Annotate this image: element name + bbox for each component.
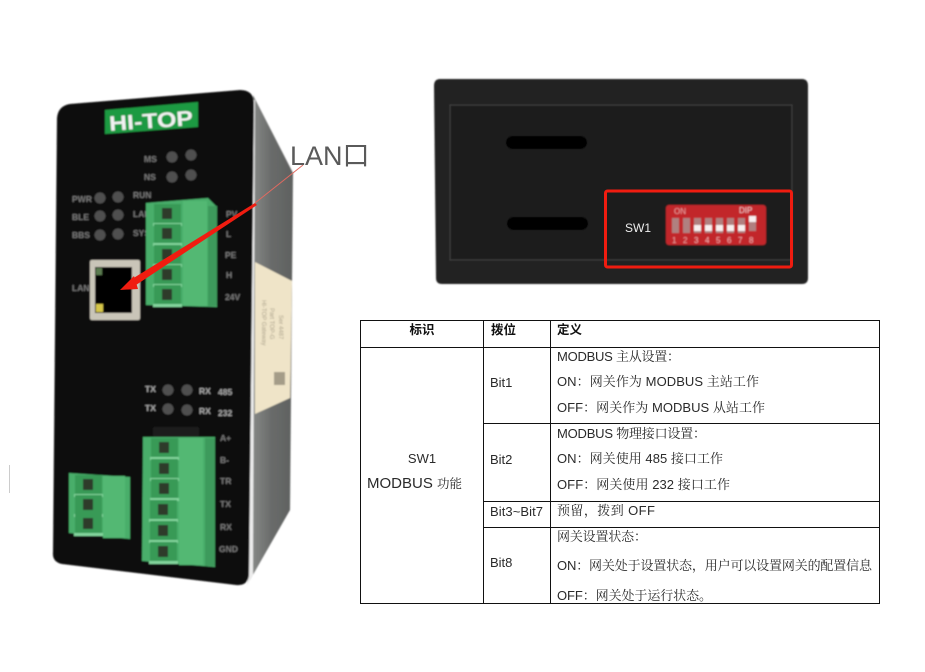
DIP switch: 4 bbox=[705, 236, 710, 245]
definition: Bit2 bbox=[557, 426, 730, 492]
row label: SW1 MODBUS: SW1 bbox=[408, 451, 436, 466]
definition: Bit2: OFF：网关使用 232 接口工作 bbox=[557, 477, 730, 492]
table header: 标识 bbox=[409, 322, 435, 337]
LAN port bbox=[90, 260, 140, 320]
status LEDs and labels: BLE bbox=[72, 212, 89, 222]
DIP switch: 5 bbox=[716, 236, 721, 245]
slot: upper bbox=[506, 136, 587, 149]
definition: Bit2: MODBUS 物理接口设置： bbox=[557, 426, 706, 441]
table: SW1 definition bbox=[360, 320, 880, 604]
device side panel: HI-TOP Gateway bbox=[260, 300, 266, 345]
definition: Bit2: ON：网关使用 485 接口工作 bbox=[557, 451, 723, 466]
photo: gateway back view bbox=[434, 79, 808, 284]
DIP switch: 1 bbox=[672, 236, 677, 245]
DIP switch: 3 bbox=[694, 236, 699, 245]
device side panel: Ser 4487 bbox=[277, 315, 283, 340]
terminal block: 3 pin bbox=[69, 473, 130, 539]
status LEDs and labels: L bbox=[226, 229, 231, 239]
status LEDs and labels: PV bbox=[226, 209, 238, 219]
photo: gateway front view bbox=[53, 90, 293, 585]
highlight box: SW1 bbox=[606, 191, 792, 267]
status LEDs and labels: RUN bbox=[133, 190, 151, 200]
terminal block: serial, 6 pin bbox=[142, 427, 215, 567]
definition: Bit1: ON：网关作为 MODBUS 主站工作 bbox=[557, 374, 759, 389]
device front panel bbox=[53, 90, 254, 585]
bit names: Bit3~Bit7 bbox=[490, 504, 543, 519]
table header bbox=[409, 322, 583, 337]
definition: Bit1: MODBUS 主从设置： bbox=[557, 349, 680, 364]
status LEDs and labels: H bbox=[226, 270, 232, 280]
device side panel: Part TOP-G bbox=[268, 308, 274, 340]
status LEDs and labels: MS bbox=[144, 154, 157, 164]
serial LEDs and labels: TX bbox=[145, 384, 156, 394]
definition: Bit8 bbox=[557, 529, 873, 603]
arrow: LAN port pointer bbox=[120, 165, 303, 290]
DIP switch: 2 bbox=[683, 236, 688, 245]
serial LEDs and labels: GND bbox=[219, 544, 238, 554]
table grid bbox=[360, 320, 880, 604]
terminal block: power, 5 pin bbox=[146, 198, 217, 307]
logo: HI-TOP bbox=[105, 102, 198, 136]
status LEDs and labels: LAN bbox=[133, 209, 150, 219]
serial LEDs and labels: RX bbox=[199, 406, 211, 416]
bit names: Bit8 bbox=[490, 555, 512, 570]
status LEDs and labels: SYS bbox=[133, 228, 150, 238]
inner panel bbox=[450, 105, 792, 260]
definition: Bit8: 网关设置状态： bbox=[557, 529, 647, 544]
row label: SW1 MODBUS bbox=[367, 451, 462, 492]
table header: 定义 bbox=[557, 322, 583, 337]
DIP switch: ON bbox=[674, 207, 686, 216]
DIP switch: 7 bbox=[738, 236, 743, 245]
definition: Bit8: OFF：网关处于运行状态。 bbox=[557, 588, 712, 603]
DIP switch: 6 bbox=[727, 236, 732, 245]
serial LEDs and labels: TX bbox=[220, 499, 231, 509]
bit names: Bit2 bbox=[490, 452, 512, 467]
slot: lower bbox=[507, 217, 588, 230]
row label: SW1 MODBUS: MODBUS 功能 bbox=[367, 475, 462, 492]
status LEDs and labels bbox=[72, 150, 240, 302]
logo: HI-TOP: HI-TOP bbox=[108, 107, 194, 136]
status LEDs and labels: NS bbox=[144, 172, 156, 182]
serial LEDs and labels: TX bbox=[145, 403, 156, 413]
label: LAN port: LAN口 bbox=[290, 141, 370, 171]
definition: Bit3~Bit7: 预留，拨到 OFF bbox=[557, 503, 655, 519]
serial LEDs and labels: 485 bbox=[218, 387, 232, 397]
serial LEDs and labels: 232 bbox=[218, 408, 232, 418]
serial LEDs and labels: RX bbox=[220, 522, 232, 532]
DIP switch bbox=[666, 205, 766, 245]
bit names bbox=[490, 375, 543, 570]
DIP switch: 8 bbox=[749, 236, 754, 245]
serial LEDs and labels bbox=[145, 384, 238, 554]
definition: Bit8: ON：网关处于设置状态，用户可以设置网关的配置信息 bbox=[557, 558, 873, 574]
label: SW1: SW1 bbox=[625, 221, 651, 235]
serial LEDs and labels: B- bbox=[220, 455, 229, 465]
device side panel bbox=[247, 95, 293, 585]
status LEDs and labels: LAN bbox=[72, 283, 89, 293]
definition: Bit1: OFF：网关作为 MODBUS 从站工作 bbox=[557, 400, 765, 415]
status LEDs and labels: PWR bbox=[72, 194, 92, 204]
status LEDs and labels: 24V bbox=[225, 292, 240, 302]
status LEDs and labels: PE bbox=[225, 250, 237, 260]
serial LEDs and labels: A+ bbox=[220, 433, 231, 443]
table header: 拨位 bbox=[491, 322, 516, 337]
back casing bbox=[434, 79, 808, 284]
serial LEDs and labels: TR bbox=[220, 476, 231, 486]
serial LEDs and labels: RX bbox=[199, 386, 211, 396]
DIP switch: DIP bbox=[739, 206, 752, 215]
bit names: Bit1 bbox=[490, 375, 512, 390]
definition: Bit1 bbox=[557, 349, 765, 415]
status LEDs and labels: BBS bbox=[72, 230, 90, 240]
